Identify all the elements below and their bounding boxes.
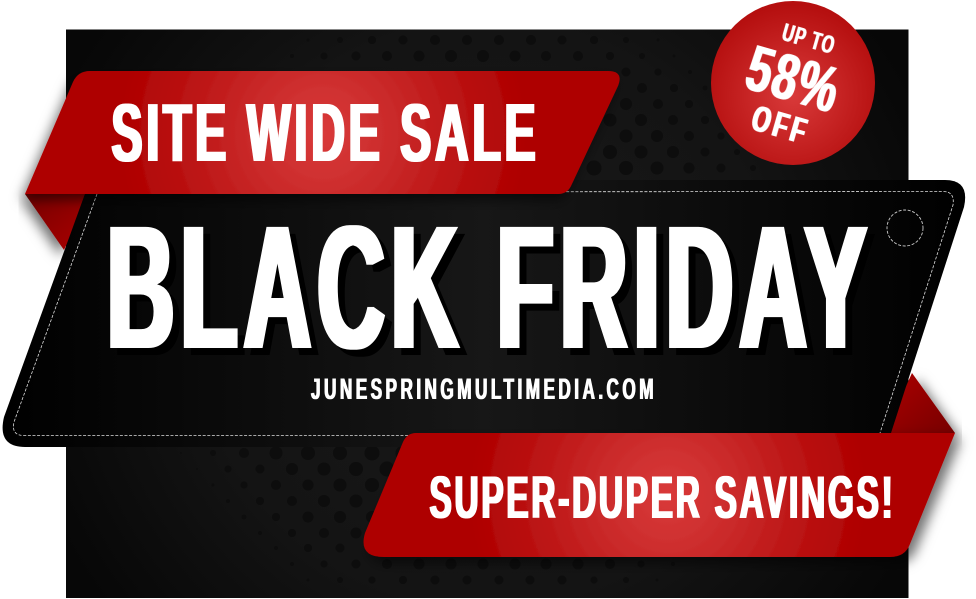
bottom ribbon [364, 433, 955, 557]
discount badge [711, 1, 875, 165]
top ribbon [25, 71, 620, 194]
halftone dots: bottom [180, 446, 675, 584]
website: JUNESPRINGMULTIMEDIA.COM [311, 373, 657, 406]
black price tag [3, 180, 965, 447]
badge text: up to: UP TO [779, 19, 839, 60]
top ribbon fold [25, 194, 90, 250]
tag stitching [13, 192, 953, 436]
ribbon text: site wide sale: SITE WIDE SALE [112, 86, 540, 179]
halftone dots: top [290, 35, 756, 176]
bottom ribbon fold [885, 373, 955, 433]
badge text: off: OFF [747, 97, 815, 153]
badge text: 58%: 58% [739, 31, 849, 127]
tag hole [887, 210, 923, 246]
